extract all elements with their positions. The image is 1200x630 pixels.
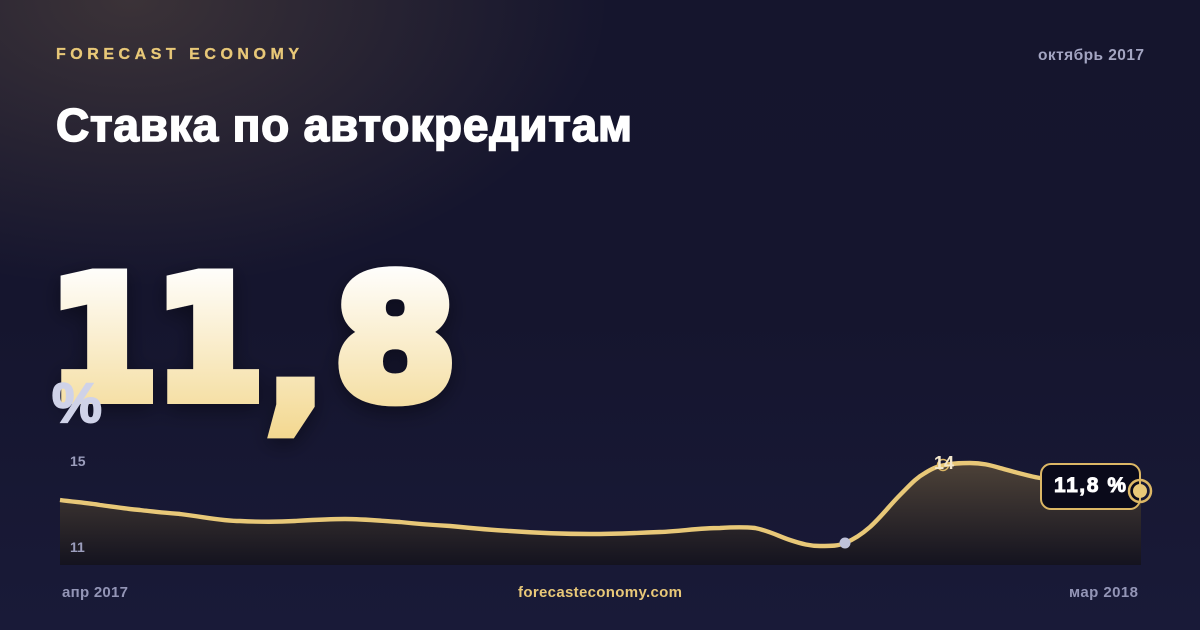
big value: ,: [267, 273, 324, 447]
big value: 1: [49, 242, 158, 438]
percent sign: %: [52, 371, 102, 434]
y axis label 15: 15: [70, 453, 86, 469]
source url: forecasteconomy.com: [518, 584, 682, 601]
big value: [49, 242, 456, 447]
big value: 1: [155, 242, 264, 438]
chart area: [60, 463, 1141, 565]
peak marker: 14: [934, 453, 954, 473]
end point marker: [1129, 480, 1151, 502]
line chart: [60, 453, 1151, 565]
big value: 8: [334, 243, 456, 438]
minimum point: [840, 538, 850, 548]
title: Ставка по автокредитам: [56, 99, 632, 151]
start date: апр 2017: [62, 584, 128, 601]
brand label: FORECAST ECONOMY: [56, 46, 299, 63]
end date: мар 2018: [1069, 584, 1138, 601]
value callout: 11,8 %: [1054, 474, 1126, 497]
date label: октябрь 2017: [1038, 47, 1144, 64]
value callout: [1041, 464, 1140, 509]
y axis label 11: 11: [70, 539, 85, 555]
chart line: [60, 463, 1060, 546]
